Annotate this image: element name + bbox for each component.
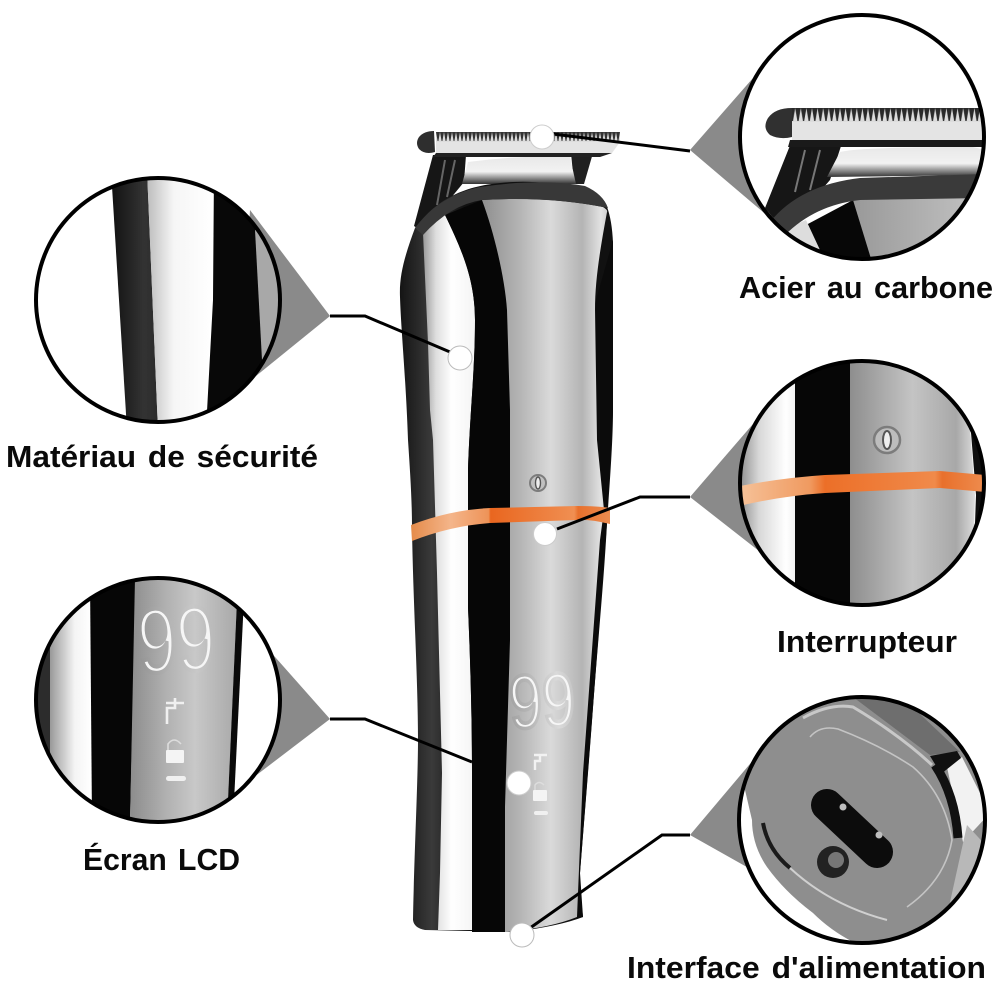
LCD display reading 99	[507, 657, 577, 815]
main clipper product illustration	[400, 131, 620, 932]
magnified body bands	[112, 180, 278, 420]
pointer triangle	[240, 210, 330, 389]
panel: safety material magnifier	[36, 170, 330, 430]
magnifier ring	[740, 15, 984, 259]
panel: switch magnifier	[690, 358, 990, 608]
magnifier ring	[740, 361, 984, 605]
callout: top blade connector	[530, 125, 690, 151]
LCD reading 99: 99	[135, 588, 218, 693]
magnified base of device	[741, 699, 983, 941]
magnifier ring	[36, 178, 280, 422]
callout: power interface connector	[510, 835, 690, 947]
pointer triangle	[690, 752, 770, 880]
magnified LCD screen	[34, 578, 280, 822]
label: LCD screen: Écran LCD	[83, 842, 240, 877]
label: power interface: Interface d'alimentation	[627, 950, 986, 985]
callout: switch connector	[534, 497, 690, 546]
magnifier ring	[36, 578, 280, 822]
power button icon	[874, 427, 900, 453]
label: safety material: Matériau de sécurité	[6, 439, 318, 474]
magnifier ring	[739, 697, 985, 943]
pointer triangle	[233, 640, 330, 793]
charging socket	[827, 804, 882, 852]
pointer triangle	[690, 70, 790, 235]
magnified switch and orange ring	[735, 358, 990, 608]
screw	[817, 846, 849, 878]
panel: LCD magnifier	[34, 578, 330, 822]
callout: safety material connector	[330, 316, 472, 370]
orange ring	[735, 471, 985, 507]
callout: LCD connector	[330, 719, 531, 795]
label: switch: Interrupteur	[777, 624, 957, 659]
pointer triangle	[690, 410, 768, 558]
label: carbon steel: Acier au carbone	[739, 270, 993, 305]
panel: carbon steel magnifier	[690, 15, 985, 262]
LCD display reading 99: 99	[507, 657, 577, 746]
LCD reading 99	[142, 608, 210, 781]
magnified blade	[742, 73, 982, 257]
panel: power interface magnifier	[690, 690, 995, 950]
